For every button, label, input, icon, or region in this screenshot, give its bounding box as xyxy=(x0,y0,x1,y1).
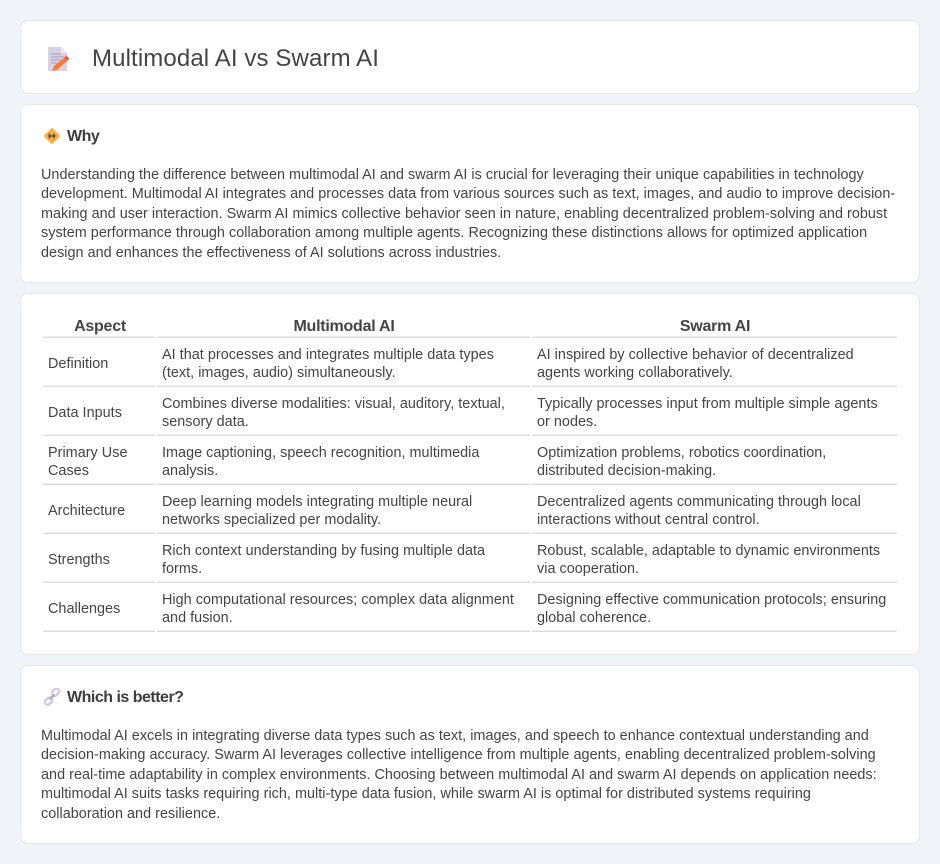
row: primary use cases: Primary Use xyxy=(48,445,128,461)
row: challenges: High computational resources; complex data alignment xyxy=(162,592,514,608)
row: architecture: networks specialized per modality. xyxy=(162,512,381,528)
text block: which is better: and real-time adaptability in complex environments. Choosing between multimodal AI and swarm AI depends on application needs: xyxy=(41,767,877,783)
row: strengths: forms. xyxy=(162,561,202,577)
row: primary use cases xyxy=(48,445,826,479)
text block: which is better: decision-making accuracy. Swarm AI leverages collective intelligence from multiple agents, enabling decentralized problem-solving xyxy=(41,747,876,763)
table header: multimodal AI: Multimodal AI xyxy=(293,318,395,335)
row: data inputs: Combines diverse modalities: visual, auditory, textual, xyxy=(162,396,505,412)
row: definition: agents working collaboratively. xyxy=(537,365,733,381)
row: primary use cases: analysis. xyxy=(162,463,218,479)
row: definition xyxy=(48,347,854,381)
row: data inputs: Data Inputs xyxy=(48,405,122,421)
heading: which is better: Which is better? xyxy=(67,689,183,706)
row: challenges: and fusion. xyxy=(162,610,233,626)
table header: aspect: Aspect xyxy=(74,318,126,335)
row: primary use cases: Image captioning, speech recognition, multimedia xyxy=(162,445,479,461)
row: primary use cases: distributed decision-making. xyxy=(537,463,716,479)
text block: which is better: collaboration and resilience. xyxy=(41,806,220,822)
row: strengths xyxy=(48,543,880,577)
icon: document with pencil xyxy=(48,47,70,71)
row: data inputs: Typically processes input from multiple simple agents xyxy=(537,396,878,412)
panel: comparison table xyxy=(20,293,920,655)
row: definition: Definition xyxy=(48,356,108,372)
text block: why: Understanding the difference between multimodal AI and swarm AI is crucial for leveraging their unique capabilities in technology xyxy=(41,167,864,183)
row: definition: (text, images, audio) simultaneously. xyxy=(162,365,396,381)
row: challenges xyxy=(48,592,886,626)
text block: why: design and enhances the effectiveness of AI solutions across industries. xyxy=(41,245,501,261)
text block: why: making and user interaction. Swarm AI mimics collective behavior seen in nature, enabling decentralized problem-solving and robust xyxy=(41,206,887,222)
panel: why xyxy=(20,104,920,283)
row: architecture: interactions without central control. xyxy=(537,512,760,528)
row: architecture: Architecture xyxy=(48,503,125,519)
row: architecture xyxy=(48,494,861,528)
row: strengths: via cooperation. xyxy=(537,561,639,577)
text block: which is better xyxy=(41,728,877,822)
row: definition: AI inspired by collective behavior of decentralized xyxy=(537,347,854,363)
row: primary use cases: Optimization problems, robotics coordination, xyxy=(537,445,826,461)
text block: which is better: multimodal AI suits tasks requiring rich, multi-type data fusion, while swarm AI is optimal for distributed systems requiring xyxy=(41,786,811,802)
heading: why: Why xyxy=(67,128,99,145)
row: challenges: Designing effective communication protocols; ensuring xyxy=(537,592,886,608)
row: data inputs xyxy=(48,396,878,430)
row: strengths: Rich context understanding by fusing multiple data xyxy=(162,543,485,559)
text block: which is better: Multimodal AI excels in integrating diverse data types such as text, images, and speech to enhance contextual understanding and xyxy=(41,728,869,744)
row: data inputs: or nodes. xyxy=(537,414,597,430)
row: data inputs: sensory data. xyxy=(162,414,249,430)
row: primary use cases: Cases xyxy=(48,463,89,479)
icon: warning diamond xyxy=(44,128,60,144)
row: strengths: Robust, scalable, adaptable to dynamic environments xyxy=(537,543,880,559)
row: challenges: Challenges xyxy=(48,601,120,617)
row: architecture: Deep learning models integrating multiple neural xyxy=(162,494,472,510)
header card xyxy=(20,20,920,94)
row: challenges: global coherence. xyxy=(537,610,651,626)
panel: which is better xyxy=(20,665,920,844)
row: definition: AI that processes and integrates multiple data types xyxy=(162,347,494,363)
text block: why: development. Multimodal AI integrates and processes data from various sources such as text, images, and audio to improve decision- xyxy=(41,186,895,202)
text block: why: system performance through collaboration among multiple agents. Recognizing these distinctions allows for optimized application xyxy=(41,225,867,241)
icon: link xyxy=(44,688,60,706)
title: Multimodal AI vs Swarm AI xyxy=(92,45,379,72)
text block: why xyxy=(41,167,895,261)
row: strengths: Strengths xyxy=(48,552,110,568)
table header: swarm AI: Swarm AI xyxy=(680,318,750,335)
row: architecture: Decentralized agents communicating through local xyxy=(537,494,861,510)
